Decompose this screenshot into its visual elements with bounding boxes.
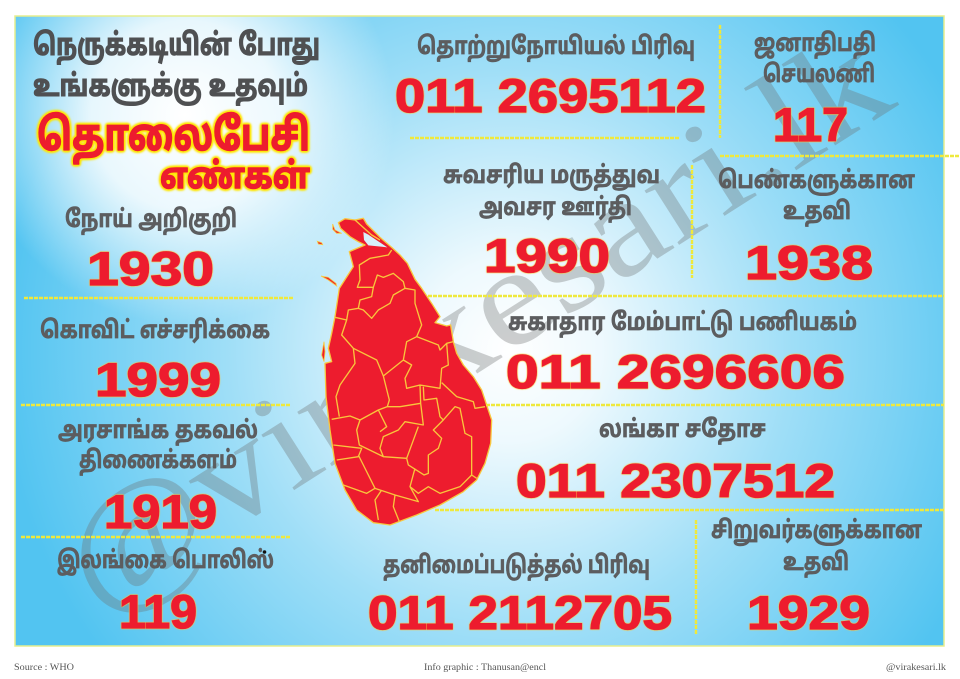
entry: quarantine unit: தனிமைப்படுத்தல் பிரிவு xyxy=(383,552,650,581)
title: நெருக்கடியின் போது xyxy=(33,29,320,65)
entry: health promotion bureau: 011 2696606 xyxy=(506,345,845,398)
entry: health promotion bureau: சுகாதார மேம்பாட்டு பணியகம் xyxy=(508,309,857,338)
entry: presidential secretariat 117: செயலணி xyxy=(763,61,875,88)
watermark: @virakesari.lk xyxy=(31,0,916,641)
footer credits xyxy=(14,662,946,673)
entry: presidential secretariat 117: 117 xyxy=(773,98,848,151)
entry: government information 1919: திணைக்களம் xyxy=(79,447,237,476)
entry: ambulance 1990: 1990 xyxy=(484,229,610,282)
entry: quarantine unit xyxy=(368,552,672,639)
title: phone numbers xyxy=(37,111,310,196)
entry: children's help 1929: உதவி xyxy=(783,549,849,578)
entry: symptoms 1930: 1930 xyxy=(87,242,214,295)
entry: children's help 1929: சிறுவர்களுக்கான xyxy=(711,517,922,546)
entry: quarantine unit: 011 2112705 xyxy=(368,586,672,639)
footer credits: Source : WHO xyxy=(14,663,74,673)
title: உங்களுக்கு உதவும் xyxy=(33,70,308,106)
entry: women's help 1938 xyxy=(718,167,915,289)
entry: women's help 1938: பெண்களுக்கான xyxy=(718,167,915,196)
entry: covid alert 1999 xyxy=(40,317,270,406)
entry: presidential secretariat 117 xyxy=(754,30,876,151)
title: phone numbers: தொலைபேசி xyxy=(37,111,310,164)
entry: police 119: 119 xyxy=(119,585,197,638)
footer credits: Info graphic : Thanusan@encl xyxy=(424,662,546,673)
map of Sri Lanka xyxy=(317,218,492,525)
entry: epidemiology unit: 011 2695112 xyxy=(395,69,706,122)
entry: ambulance 1990 xyxy=(443,162,660,282)
entry: women's help 1938: உதவி xyxy=(783,198,851,227)
entry: ambulance 1990: சுவசரிய மருத்துவ xyxy=(443,162,660,191)
footer credits: @virakesari.lk xyxy=(886,663,946,673)
entry: epidemiology unit: தொற்றுநோயியல் பிரிவு xyxy=(417,33,695,62)
entry: symptoms 1930 xyxy=(65,206,237,295)
entry: lanka sathosa: லங்கா சதோச xyxy=(599,416,766,445)
entry: government information 1919: 1919 xyxy=(104,485,217,538)
title xyxy=(33,29,320,106)
entry: epidemiology unit xyxy=(395,33,706,122)
entry: women's help 1938: 1938 xyxy=(745,236,873,289)
title: phone numbers: எண்கள் xyxy=(160,155,310,196)
entry: government information 1919: அரசாங்க தகவல் xyxy=(58,417,258,446)
entry: police 119 xyxy=(57,547,274,638)
entry: police 119: இலங்கை பொலிஸ் xyxy=(57,547,274,576)
entry: covid alert 1999: கொவிட் எச்சரிக்கை xyxy=(40,317,270,344)
entry: presidential secretariat 117: ஜனாதிபதி xyxy=(754,30,876,60)
entry: children's help 1929 xyxy=(711,517,922,639)
entry: ambulance 1990: அவசர ஊர்தி xyxy=(479,194,632,223)
entry: lanka sathosa: 011 2307512 xyxy=(516,454,835,507)
entry: health promotion bureau xyxy=(506,309,857,398)
entry: government information 1919 xyxy=(58,417,258,538)
entry: symptoms 1930: நோய் அறிகுறி xyxy=(65,206,237,235)
entry: lanka sathosa xyxy=(516,416,835,507)
entry: children's help 1929: 1929 xyxy=(747,586,870,639)
entry: covid alert 1999: 1999 xyxy=(95,353,221,406)
